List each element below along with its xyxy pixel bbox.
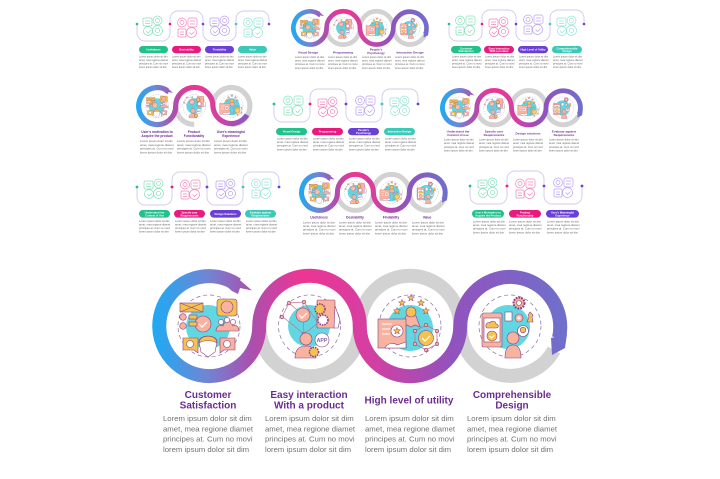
body text columns: lorem ipsum dolor sit dim [163,445,249,454]
pill labels: Comprehensible [556,47,578,50]
panel: middle-centre line timeline [273,89,419,151]
pill labels: Easy interaction [489,47,509,50]
body text: amet, mea regione diamet [553,58,583,62]
body text: amet, mea regione diamet [479,141,509,145]
body text: principes at. Cum no movi [339,228,372,232]
body text: lorem ipsum dolor sit dim [246,230,277,234]
body text: lorem ipsum dolor sit dim [339,231,371,235]
body text: lorem ipsum dolor sit dim [210,230,241,234]
body text: Lorem ipsum dolor sit dim [509,220,541,224]
body text [295,55,425,70]
body text: principes at. Cum no movi [246,226,277,230]
icon: comprehensible design [479,295,541,358]
body text: amet, mea regione diamet [175,222,206,226]
body text: lorem ipsum dolor sit dim [177,150,210,154]
pill labels: User's Motivation to [475,211,501,214]
pill labels: Customer [460,47,472,50]
main rings with icons [159,275,567,376]
body text: amet, mea regione diamet [349,140,380,144]
pill labels: Experience [555,213,570,217]
body text: amet, mea regione diamet [485,58,515,62]
icons [284,96,410,116]
band end cut [551,334,567,355]
body text: Lorem ipsum dolor sit dim [277,138,308,140]
headings: Findability [383,216,399,220]
body text: lorem ipsum dolor sit dim [277,147,308,151]
body text: Lorem ipsum dolor sit dim [349,138,380,140]
body text: Lorem ipsum dolor sit dim [444,138,474,142]
body text: principes at. Cum no movi [349,144,380,148]
body text: Lorem ipsum dolor sit dim [313,138,344,140]
headings: Understand the [447,130,469,134]
panel: bottom-right line timeline [469,171,583,234]
body text: Lorem ipsum dolor sit dim [395,56,424,59]
gradient snake band [159,276,560,376]
body text: Lorem ipsum dolor sit dim [295,56,324,59]
body text columns: principes at. Cum no movi [365,435,455,444]
body text: Lorem ipsum dolor sit dim [172,56,201,58]
body text: principes at. Cum no movi [553,62,583,66]
body text [303,220,445,235]
panel: top-left line timeline [136,11,270,69]
pill labels: Requirements [181,213,199,217]
pill labels: Requirements [252,213,270,217]
body text: amet, mea regione diamet [177,143,211,147]
headings: Context of use [447,133,469,137]
body text columns: lorem ipsum dolor sit dim [365,445,451,454]
body text: Lorem ipsum dolor sit dim [479,138,509,142]
body text: lorem ipsum dolor sit dim [295,66,323,70]
body text: principes at. Cum no movi [140,147,174,151]
body text [444,138,579,153]
icons [143,16,263,38]
pill labels: High Level of Utility [520,48,546,52]
panel: bottom-left line timeline [136,172,280,234]
body text: Lorem ipsum dolor sit dim [139,220,170,223]
body text: principes at. Cum no movi [375,228,408,232]
body text: lorem ipsum dolor sit dim [549,149,578,153]
body text: Lorem ipsum dolor sit dim [549,138,579,142]
body text: amet, mea regione diamet [473,223,506,227]
heading: easy interaction: With a product [274,401,345,412]
body text: amet, mea regione diamet [519,58,549,62]
headings [141,130,245,138]
body text: Lorem ipsum dolor sit dim [553,56,582,58]
body text: amet, mea regione diamet [238,59,267,62]
pill labels: Psychology [356,131,372,135]
connector line with dots [136,11,270,41]
body text: principes at. Cum no movi [513,145,543,149]
headings: Value [423,216,431,220]
pill labels: Findability [213,48,227,52]
pill labels: People's [358,129,369,132]
body text: Lorem ipsum dolor sit dim [246,220,277,223]
body text [139,219,278,234]
headings: Acquire the product [141,134,174,138]
body text: lorem ipsum dolor sit dim [479,149,508,153]
body text: lorem ipsum dolor sit dim [214,150,247,154]
body text: lorem ipsum dolor sit dim [375,231,407,235]
body text: amet, mea regione diamet [395,59,425,63]
body text: principes at. Cum no movi [303,228,336,232]
body text: amet, mea regione diamet [205,59,234,62]
body text: amet, mea regione diamet [513,141,543,145]
headings: Desirability [346,216,364,220]
body text: principes at. Cum no movi [479,145,509,149]
rings [139,87,250,125]
body text columns: lorem ipsum dolor sit dim [467,445,553,454]
body text: principes at. Cum no movi [549,145,579,149]
body text: amet, mea regione diamet [210,222,241,226]
pill labels: User's Meaningful [551,211,574,214]
body text: lorem ipsum dolor sit dim [139,230,170,234]
body text columns: amet, mea regione diamet [365,424,456,433]
pill labels: Acquire the Product [475,213,501,217]
pill labels [472,210,579,218]
body text: amet, mea regione diamet [509,223,542,227]
pill labels: With a product [490,49,508,53]
pill labels: Visual Design [283,130,301,134]
body text [277,136,417,151]
heading: customer satisfaction: Satisfaction [180,401,236,412]
headings [310,216,431,220]
body text: principes at. Cum no movi [214,147,248,151]
body text: Lorem ipsum dolor sit dim [412,220,444,224]
body text: principes at. Cum no movi [313,144,344,148]
rings [442,90,583,125]
body text: lorem ipsum dolor sit dim [303,231,335,235]
body text: amet, mea regione diamet [339,224,372,228]
connector line with dots [273,89,419,122]
body text: principes at. Cum no movi [175,226,206,230]
body text: amet, mea regione diamet [444,141,474,145]
body text: Lorem ipsum dolor sit dim [519,56,548,58]
body text: amet, mea regione diamet [139,59,168,62]
body text columns [163,414,558,454]
body text: Lorem ipsum dolor sit dim [214,139,247,143]
grey ring segments [259,276,554,376]
body text: principes at. Cum no movi [473,227,506,231]
body text: principes at. Cum no movi [277,144,308,148]
body text columns: amet, mea regione diamet [163,424,254,433]
headings: Requirements [554,133,575,137]
icon: high level of utility [378,294,441,357]
headings [298,48,424,55]
body text [473,220,580,234]
body text: Lorem ipsum dolor sit dim [375,220,407,224]
headings: Design solutions [516,132,541,136]
pill labels: Context of Use [145,213,164,217]
headings: Usefulness [310,216,328,220]
icon: easy interaction [278,295,340,358]
body text: principes at. Cum no movi [238,62,267,66]
pill labels: Interaction Design [388,130,412,134]
body text: amet, mea regione diamet [313,140,344,144]
body text: amet, mea regione diamet [385,140,416,144]
body text: Lorem ipsum dolor sit dim [139,56,168,58]
body text: principes at. Cum no movi [139,62,168,66]
body text: lorem ipsum dolor sit dim [205,66,233,69]
pill labels: Functionality [517,213,534,217]
body text: Lorem ipsum dolor sit dim [362,56,391,59]
body text: lorem ipsum dolor sit dim [452,65,480,69]
body text: amet, mea regione diamet [140,143,174,147]
headings: User's meaningful [217,130,245,134]
body text: principes at. Cum no movi [452,62,482,66]
body text: lorem ipsum dolor sit dim [328,66,356,70]
pill labels: Desirability [179,48,194,52]
headings: Requirements [484,133,505,137]
pill labels: Satisfaction [458,49,474,53]
body text: Lorem ipsum dolor sit dim [385,138,416,140]
panel: top-middle ring timeline [293,11,429,70]
body text: lorem ipsum dolor sit dim [485,65,513,69]
body text: Lorem ipsum dolor sit dim [485,56,514,58]
headings: User's motivation to [141,130,173,134]
body text: principes at. Cum no movi [444,145,474,149]
pill labels: Understand the [145,211,164,214]
body text: principes at. Cum no movi [395,62,425,66]
body text columns: amet, mea regione diamet [467,424,558,433]
icons [478,178,573,198]
connector line with dots [469,171,583,204]
body text: principes at. Cum no movi [519,62,549,66]
connector line with dots [136,172,280,205]
heading: high level of utility: High level of utility [365,396,454,406]
panel: top-right line timeline [448,10,585,69]
body text columns: Lorem ipsum dolor sit dim [467,414,556,423]
body text: amet, mea regione diamet [412,224,445,228]
body text: Lorem ipsum dolor sit dim [177,139,210,143]
heading: comprehensible design: Design [495,401,529,412]
body text [140,139,248,154]
body text: amet, mea regione diamet [139,222,170,226]
pill labels: Evaluate against [250,211,271,214]
body text: amet, mea regione diamet [547,223,580,227]
body text: lorem ipsum dolor sit dim [412,231,444,235]
headings: Programming [333,50,353,54]
headings: Visual Design [298,50,318,54]
body text: amet, mea regione diamet [549,141,579,145]
headings: Functionality [184,134,204,138]
body text: Lorem ipsum dolor sit dim [452,56,481,58]
body text columns: principes at. Cum no movi [467,435,557,444]
body text: lorem ipsum dolor sit dim [444,149,473,153]
pill labels [276,128,415,135]
icons [456,15,576,36]
body text: Lorem ipsum dolor sit dim [175,220,206,223]
icon: customer satisfaction [178,295,240,357]
body text: lorem ipsum dolor sit dim [172,66,200,69]
body text: amet, mea regione diamet [362,59,392,63]
body text: lorem ipsum dolor sit dim [238,66,266,69]
headings: Evaluate against [552,130,576,134]
body text [452,54,583,69]
headings: Experience [222,134,240,138]
headings [447,130,576,137]
body text: lorem ipsum dolor sit dim [139,66,167,69]
body text: lorem ipsum dolor sit dim [473,230,505,234]
body text: amet, mea regione diamet [246,222,277,226]
pill labels: Design Solutions [215,212,237,216]
body text: amet, mea regione diamet [303,224,336,228]
headings: People's [370,48,382,52]
body text: principes at. Cum no movi [547,227,580,231]
heading: comprehensible design: Comprehensible [473,390,551,401]
rings [293,11,429,45]
body text: principes at. Cum no movi [295,62,325,66]
body text columns: Lorem ipsum dolor sit dim [163,414,252,423]
body text: principes at. Cum no movi [139,226,170,230]
body text: Lorem ipsum dolor sit dim [303,220,335,224]
headings: Psychology [367,51,385,55]
headings: Interaction Design [396,50,424,54]
pill labels: Usefulness [146,48,161,52]
body text: lorem ipsum dolor sit dim [140,150,173,154]
body text columns: amet, mea regione diamet [265,424,356,433]
body text: principes at. Cum no movi [210,226,241,230]
body text: Lorem ipsum dolor sit dim [140,139,173,143]
panel: bottom-centre ring timeline [302,174,448,235]
body text: Lorem ipsum dolor sit dim [238,56,267,58]
body text: principes at. Cum no movi [362,62,392,66]
body text: amet, mea regione diamet [277,140,308,144]
body text: amet, mea regione diamet [328,59,358,63]
pill labels: Specify user [182,211,197,214]
icons [144,179,271,200]
pill labels [139,46,267,53]
body text: principes at. Cum no movi [385,144,416,148]
body text: amet, mea regione diamet [452,58,482,62]
body text: lorem ipsum dolor sit dim [362,66,390,70]
body text: principes at. Cum no movi [177,147,211,151]
heading: customer satisfaction: Customer [185,390,231,401]
body text: Lorem ipsum dolor sit dim [473,220,505,224]
body text: lorem ipsum dolor sit dim [509,230,541,234]
headings: Product [188,130,200,134]
body text: lorem ipsum dolor sit dim [175,230,206,234]
body text: principes at. Cum no movi [328,62,358,66]
body text: amet, mea regione diamet [172,59,201,62]
body text: Lorem ipsum dolor sit dim [205,56,234,58]
body text columns: principes at. Cum no movi [163,435,253,444]
heading: easy interaction: Easy interaction [270,390,348,401]
body text: lorem ipsum dolor sit dim [395,66,423,70]
headings: Specify user [485,130,503,134]
body text columns: lorem ipsum dolor sit dim [265,445,351,454]
body text: Lorem ipsum dolor sit dim [547,220,579,224]
icon: easy interaction: APP [317,338,328,344]
body text: lorem ipsum dolor sit dim [547,230,579,234]
body text columns: principes at. Cum no movi [265,435,355,444]
body text columns: Lorem ipsum dolor sit dim [265,414,354,423]
body text: Lorem ipsum dolor sit dim [339,220,371,224]
body text: lorem ipsum dolor sit dim [313,147,344,151]
connector line with dots [448,10,585,41]
body text columns: Lorem ipsum dolor sit dim [365,414,454,423]
panel: middle-right ring timeline [442,90,583,153]
body text: lorem ipsum dolor sit dim [349,147,380,151]
body text: amet, mea regione diamet [295,59,325,63]
pill labels [451,46,582,53]
pill labels: Product [520,211,530,214]
body text: amet, mea regione diamet [214,143,248,147]
panel: main large ring timeline [159,275,567,454]
pill labels: Design [563,49,572,53]
pill labels: Programming [319,130,337,134]
body text: lorem ipsum dolor sit dim [513,149,542,153]
panel: middle-left three-ring timeline [139,87,250,154]
body text [139,56,267,69]
pill labels [139,210,276,218]
arrow head [225,275,252,294]
body text: principes at. Cum no movi [172,62,201,66]
pill labels: Value [249,48,257,52]
body text: principes at. Cum no movi [509,227,542,231]
body text: lorem ipsum dolor sit dim [385,147,416,151]
body text: principes at. Cum no movi [412,228,445,232]
body text: principes at. Cum no movi [205,62,234,66]
body text: amet, mea regione diamet [375,224,408,228]
body text: lorem ipsum dolor sit dim [519,65,547,69]
body text: Lorem ipsum dolor sit dim [328,56,357,59]
body text: Lorem ipsum dolor sit dim [513,138,543,142]
body text: principes at. Cum no movi [485,62,515,66]
body text: Lorem ipsum dolor sit dim [210,220,241,223]
body text: lorem ipsum dolor sit dim [553,65,581,69]
rings [302,174,448,210]
